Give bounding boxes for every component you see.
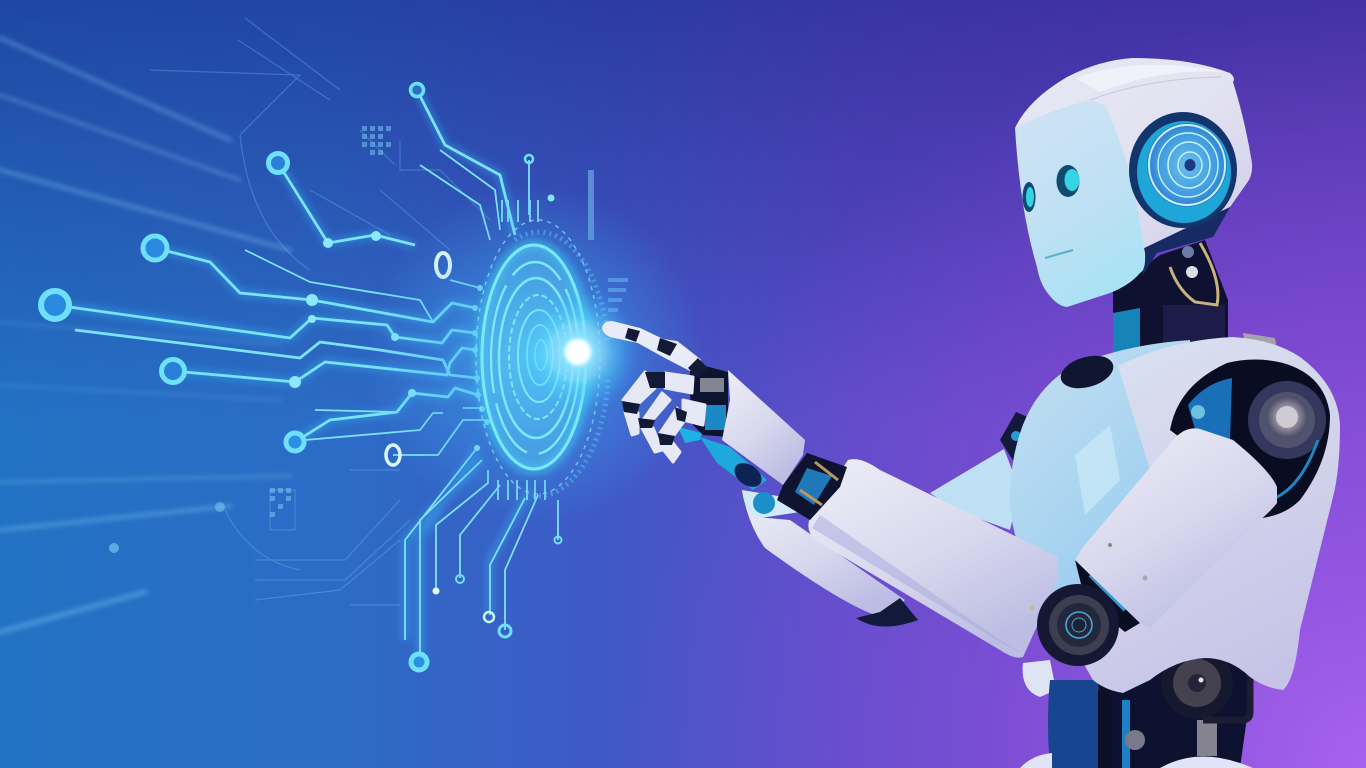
robot shoulder shell xyxy=(1070,337,1340,693)
light streaks xyxy=(0,38,290,632)
robot hand xyxy=(603,322,805,492)
small trace junctions xyxy=(109,194,554,553)
robot elbow joint xyxy=(1030,584,1119,666)
faint background circuitry xyxy=(150,18,490,605)
head highlight xyxy=(1075,65,1225,92)
robot wrist xyxy=(777,453,847,520)
eye: near xyxy=(1056,165,1080,197)
robot forearm xyxy=(808,459,1058,658)
robot lower body xyxy=(1020,647,1255,768)
robot far arm behind body xyxy=(742,412,1030,627)
glowing circuit traces xyxy=(55,90,558,660)
eye: far xyxy=(1022,182,1036,212)
ear disc xyxy=(1129,112,1237,228)
circuit nodes xyxy=(41,84,562,670)
robot upper arm xyxy=(1075,428,1277,632)
small data grids xyxy=(270,126,628,517)
other fingers xyxy=(622,372,705,462)
hologram disc xyxy=(365,185,705,525)
robot neck xyxy=(1113,240,1277,360)
robot torso xyxy=(1010,340,1215,640)
mouth xyxy=(1045,250,1073,258)
robot head xyxy=(1015,58,1252,307)
index finger xyxy=(603,322,708,378)
